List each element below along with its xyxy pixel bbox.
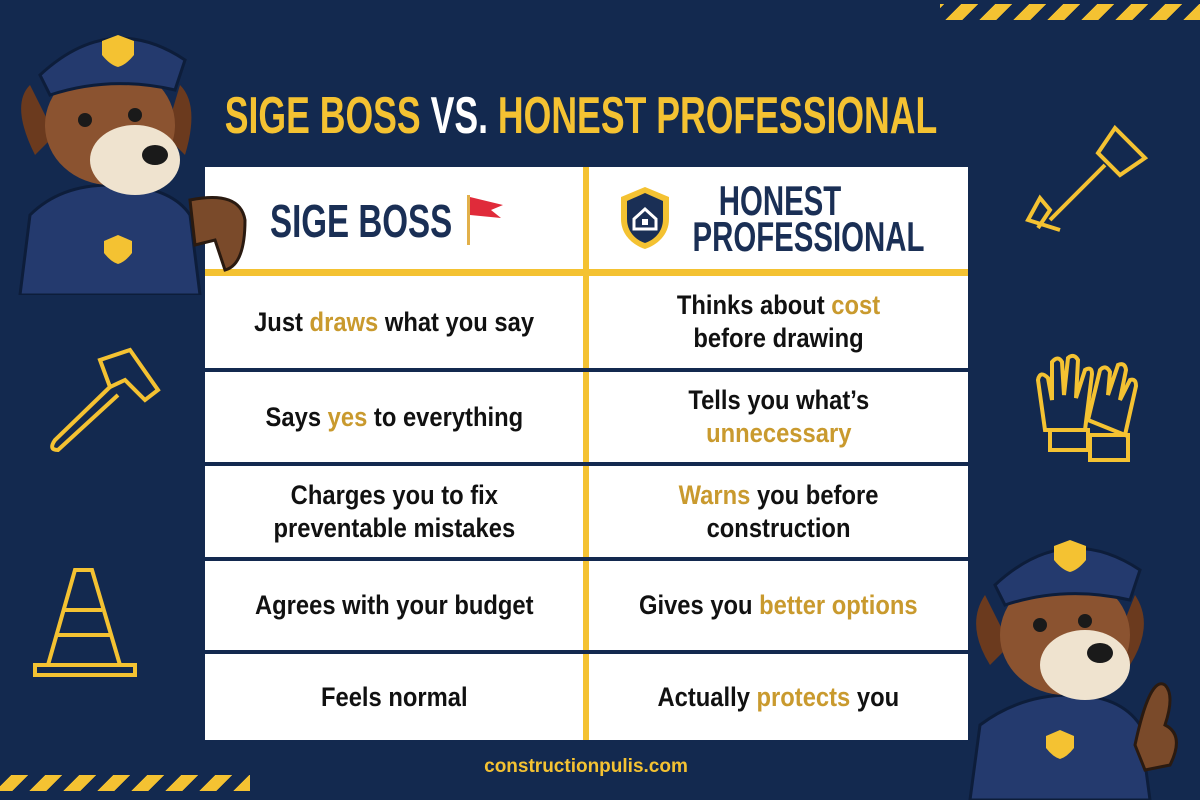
header: sige boss: SIGE BOSS <box>270 195 452 247</box>
row 5: Feels normal <box>321 682 467 712</box>
icon: dog police bottom right <box>968 540 1178 800</box>
row 2: Says yes to everything <box>265 402 523 432</box>
header: honest professional: PROFESSIONAL <box>692 213 924 260</box>
icon: shovel <box>1025 124 1148 232</box>
header: honest professional: HONEST <box>719 177 841 224</box>
icon: dog police top left <box>18 35 246 295</box>
icon: shield house <box>621 187 669 249</box>
footer url: constructionpulis.com <box>484 756 688 777</box>
row 3 <box>273 480 515 542</box>
stripes bottom left <box>0 775 250 791</box>
comparison table: Thinks about cost <box>677 290 880 320</box>
comparison table: Actually protects you <box>658 682 899 712</box>
comparison table: Warns you before <box>679 480 878 510</box>
icon: traffic cone <box>33 568 137 677</box>
row 3: preventable mistakes <box>273 512 515 542</box>
stripes top right <box>940 4 1200 20</box>
icon: hammer <box>50 348 161 452</box>
icon: red flag <box>467 195 503 245</box>
comparison table: unnecessary <box>706 418 851 448</box>
row 1: Just draws what you say <box>254 306 534 336</box>
comparison table: Tells you what’s <box>688 385 869 415</box>
row 3: Charges you to fix <box>290 480 498 510</box>
row 4: Agrees with your budget <box>255 590 533 620</box>
comparison table: before drawing <box>693 323 864 353</box>
comparison table: Gives you better options <box>639 590 918 620</box>
icon: gloves <box>1036 354 1138 462</box>
header: honest professional <box>692 177 924 260</box>
comparison table: construction <box>707 512 850 542</box>
comparison table <box>205 167 968 740</box>
title: SIGE BOSS VS. HONEST PROFESSIONAL <box>225 87 937 145</box>
